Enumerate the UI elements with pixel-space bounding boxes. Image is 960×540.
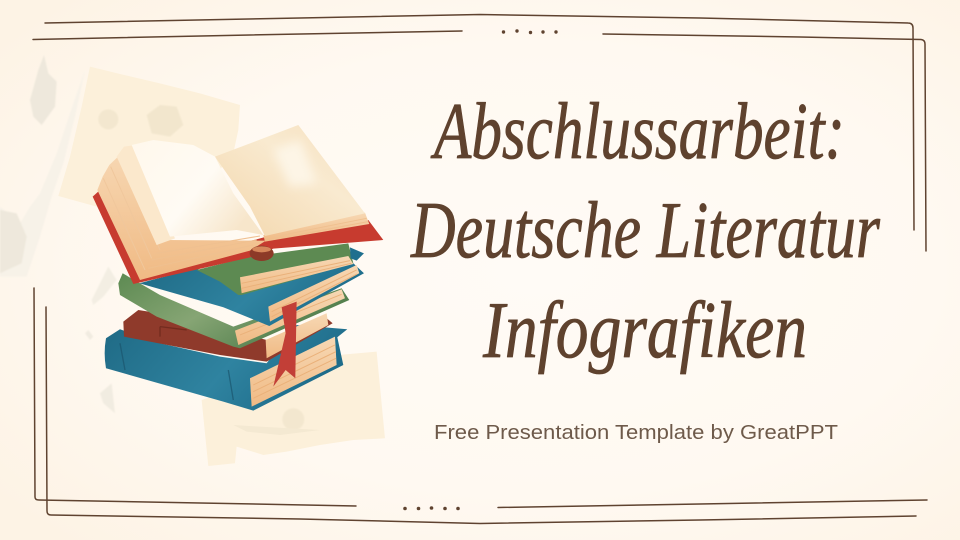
book: green top bbox=[197, 243, 364, 295]
frame: top and right lines bbox=[33, 14, 926, 251]
background paint stains bbox=[0, 55, 117, 413]
book: bottom teal bbox=[105, 325, 347, 411]
left page block bbox=[97, 148, 266, 280]
bookmark ribbon bbox=[273, 302, 297, 387]
dots: top bbox=[502, 29, 558, 34]
dots: bottom bbox=[403, 506, 460, 510]
title bbox=[410, 88, 881, 375]
left inner pages bbox=[117, 145, 175, 245]
frame: bottom and left lines bbox=[34, 288, 927, 524]
torn paper: top left bbox=[58, 67, 240, 210]
title: Infografiken bbox=[482, 287, 807, 375]
book: green middle bbox=[118, 273, 349, 348]
open book bbox=[93, 125, 383, 284]
title: Abschlussarbeit: bbox=[430, 88, 845, 176]
subtitle: Free Presentation Template by GreatPPT bbox=[434, 422, 838, 444]
right page block bbox=[263, 213, 369, 242]
right page bbox=[215, 125, 365, 236]
book: teal upper bbox=[139, 263, 364, 326]
illustration: stack of books bbox=[93, 125, 383, 411]
torn paper: bottom right bbox=[202, 352, 385, 466]
cover bbox=[93, 190, 383, 284]
book: red bbox=[123, 310, 333, 362]
left page bbox=[132, 140, 263, 237]
spine gap bbox=[250, 246, 274, 261]
